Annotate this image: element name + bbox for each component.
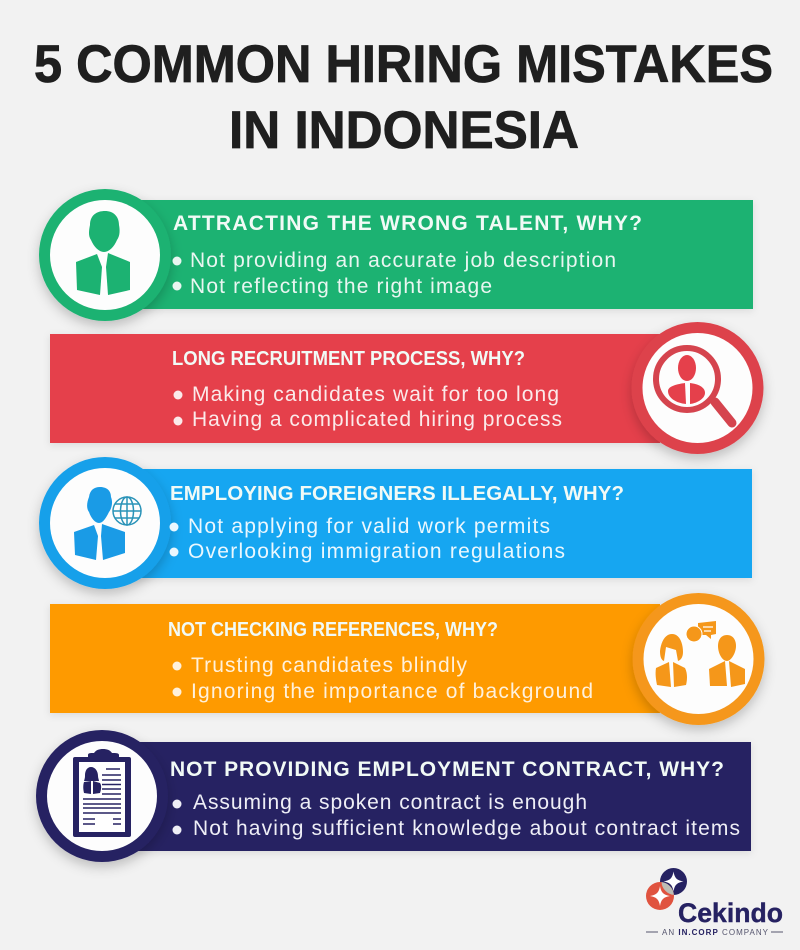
bullet list: Not reflecting the right image <box>190 275 492 298</box>
heading: NOT CHECKING REFERENCES, WHY? <box>168 618 498 641</box>
icon: person with globe <box>39 457 171 589</box>
heading: ATTRACTING THE WRONG TALENT, WHY? <box>173 212 642 235</box>
bullet list <box>172 249 616 298</box>
bullet list: Not providing an accurate job description <box>190 249 616 272</box>
bullet list: Having a complicated hiring process <box>192 408 562 431</box>
logo: Cekindo <box>646 868 783 937</box>
bullet list: Trusting candidates blindly <box>191 654 468 677</box>
bullet list <box>174 383 562 431</box>
bullet list: Ignoring the importance of background <box>191 680 593 703</box>
logo wordmark: Cekindo <box>678 898 783 928</box>
title <box>34 35 773 160</box>
bullet list: Making candidates wait for too long <box>192 383 559 406</box>
logo tagline: AN IN.CORP COMPANY <box>662 928 769 937</box>
logo mark <box>646 868 687 910</box>
bullet list: Assuming a spoken contract is enough <box>193 791 587 814</box>
icon: two people talking <box>632 593 764 725</box>
icon: magnifier with person <box>632 322 764 454</box>
panel: long recruitment process <box>50 322 764 454</box>
bullet list <box>170 515 565 563</box>
bullet list: Overlooking immigration regulations <box>188 540 565 563</box>
icon: person <box>39 189 171 321</box>
icon: clipboard with resume <box>36 730 168 862</box>
title: IN INDONESIA <box>229 101 579 160</box>
title: 5 COMMON HIRING MISTAKES <box>34 35 773 94</box>
heading: LONG RECRUITMENT PROCESS, WHY? <box>172 347 525 370</box>
bullet list <box>172 791 740 840</box>
heading: EMPLOYING FOREIGNERS ILLEGALLY, WHY? <box>170 482 624 505</box>
panel: attracting the wrong talent <box>39 189 753 321</box>
panel: employing foreigners illegally <box>39 457 752 589</box>
heading: NOT PROVIDING EMPLOYMENT CONTRACT, WHY? <box>170 758 724 781</box>
bullet list: Not having sufficient knowledge about contract items <box>193 817 740 840</box>
bullet list: Not applying for valid work permits <box>188 515 550 538</box>
panel: not checking references <box>50 593 764 725</box>
panel: not providing employment contract <box>36 730 751 862</box>
bullet list <box>172 654 593 703</box>
